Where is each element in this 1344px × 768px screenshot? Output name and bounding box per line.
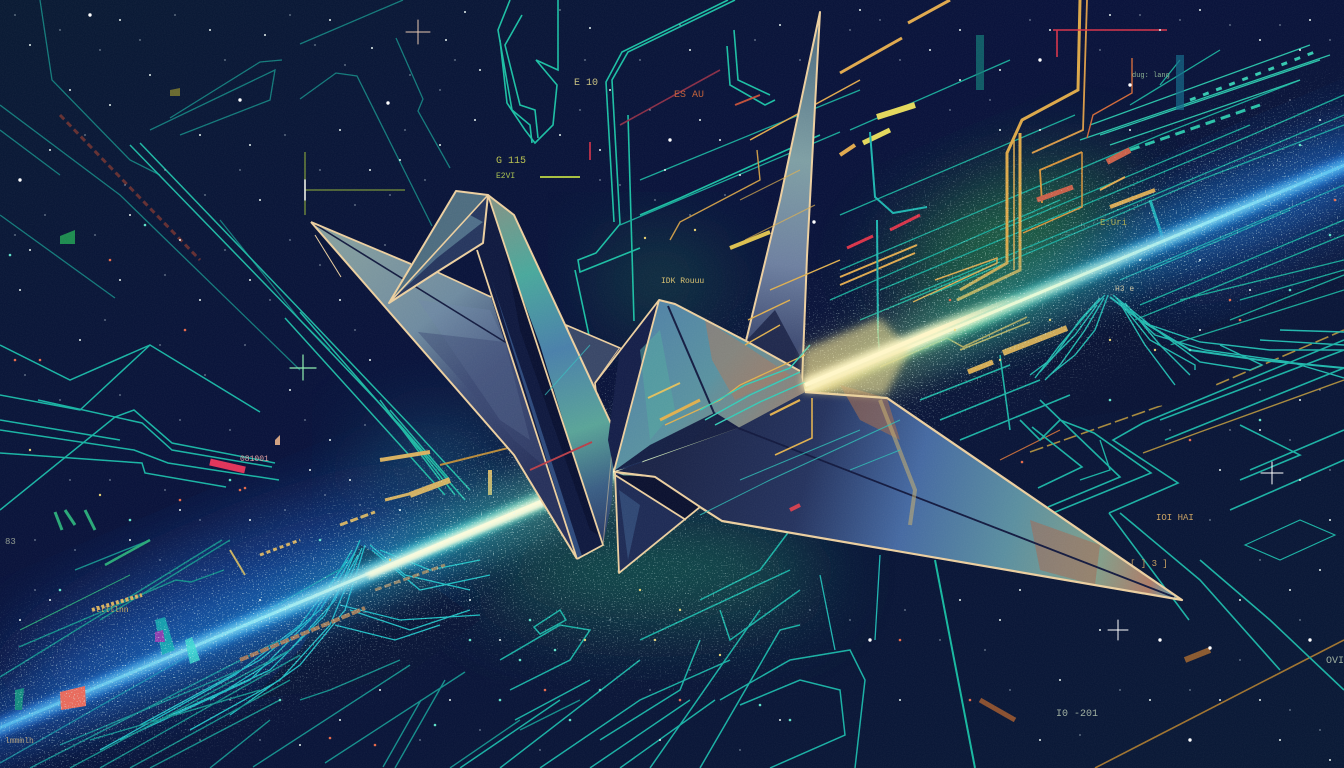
- circuit traces: bottom centre: [460, 530, 865, 768]
- tiny readouts: IDK Rouuu: [661, 277, 704, 286]
- mountain: left wireframe peak: [100, 540, 490, 750]
- crane: head and beak: [389, 191, 488, 303]
- glow at the wing root: [803, 295, 1020, 396]
- circuit traces: lower left: [0, 345, 279, 510]
- crane: neck: [477, 195, 614, 559]
- tiny readouts: E:Uri: [1100, 218, 1127, 228]
- tiny readouts: I0 -201: [1056, 709, 1098, 720]
- circuit traces: lower right: [920, 340, 1344, 690]
- tiny readouts: lmmmlh: [5, 737, 34, 746]
- tiny readouts: H3 e: [1115, 285, 1134, 294]
- tiny readouts: E 10: [574, 78, 598, 89]
- circuit traces: bright diagonal bundle: [130, 143, 470, 500]
- tiny readouts: dug: lang: [1132, 72, 1170, 80]
- crane: upright wing: [746, 12, 820, 383]
- circuit traces: upper left: [0, 0, 450, 370]
- circuit traces: right diagonal lines: [620, 45, 1344, 345]
- tiny readouts: 081001: [240, 455, 269, 464]
- colour chips on the beam: [15, 88, 280, 710]
- tiny readouts: 83: [5, 537, 16, 547]
- circuit traces: cyan verticals: [820, 35, 1180, 768]
- circuit traces: lower left diagonals: [0, 510, 580, 768]
- gold dashes along the beam, lower left: [92, 445, 520, 660]
- tiny readouts: OVI: [1326, 656, 1344, 667]
- mountain: right wireframe peak: [1030, 295, 1344, 420]
- tiny readouts: IOI HAI: [1156, 513, 1194, 523]
- circuit traces: red accents: [60, 30, 1167, 470]
- circuit traces: centre top: [498, 0, 820, 340]
- tiny readouts: lllllnn: [95, 606, 129, 615]
- circuit traces: gold and orange right: [670, 0, 1344, 768]
- crane: lower belly: [615, 472, 700, 573]
- beam of light: [0, 157, 1344, 736]
- origami crane: [311, 12, 1182, 600]
- crane: tail wing: [311, 222, 590, 560]
- crane: rear back panel behind the neck: [566, 325, 620, 425]
- circuit overlay on the crane: [530, 95, 915, 525]
- tiny readouts: ES AU: [674, 90, 704, 101]
- tiny readouts: [ ] 3 ]: [1130, 559, 1168, 569]
- crane: chest and breast: [595, 300, 805, 471]
- sparkle stars: [290, 20, 1283, 640]
- crane: right wing: [615, 385, 1182, 600]
- tiny readouts: G 115: [496, 156, 526, 167]
- tiny readouts: E2VI: [496, 172, 515, 181]
